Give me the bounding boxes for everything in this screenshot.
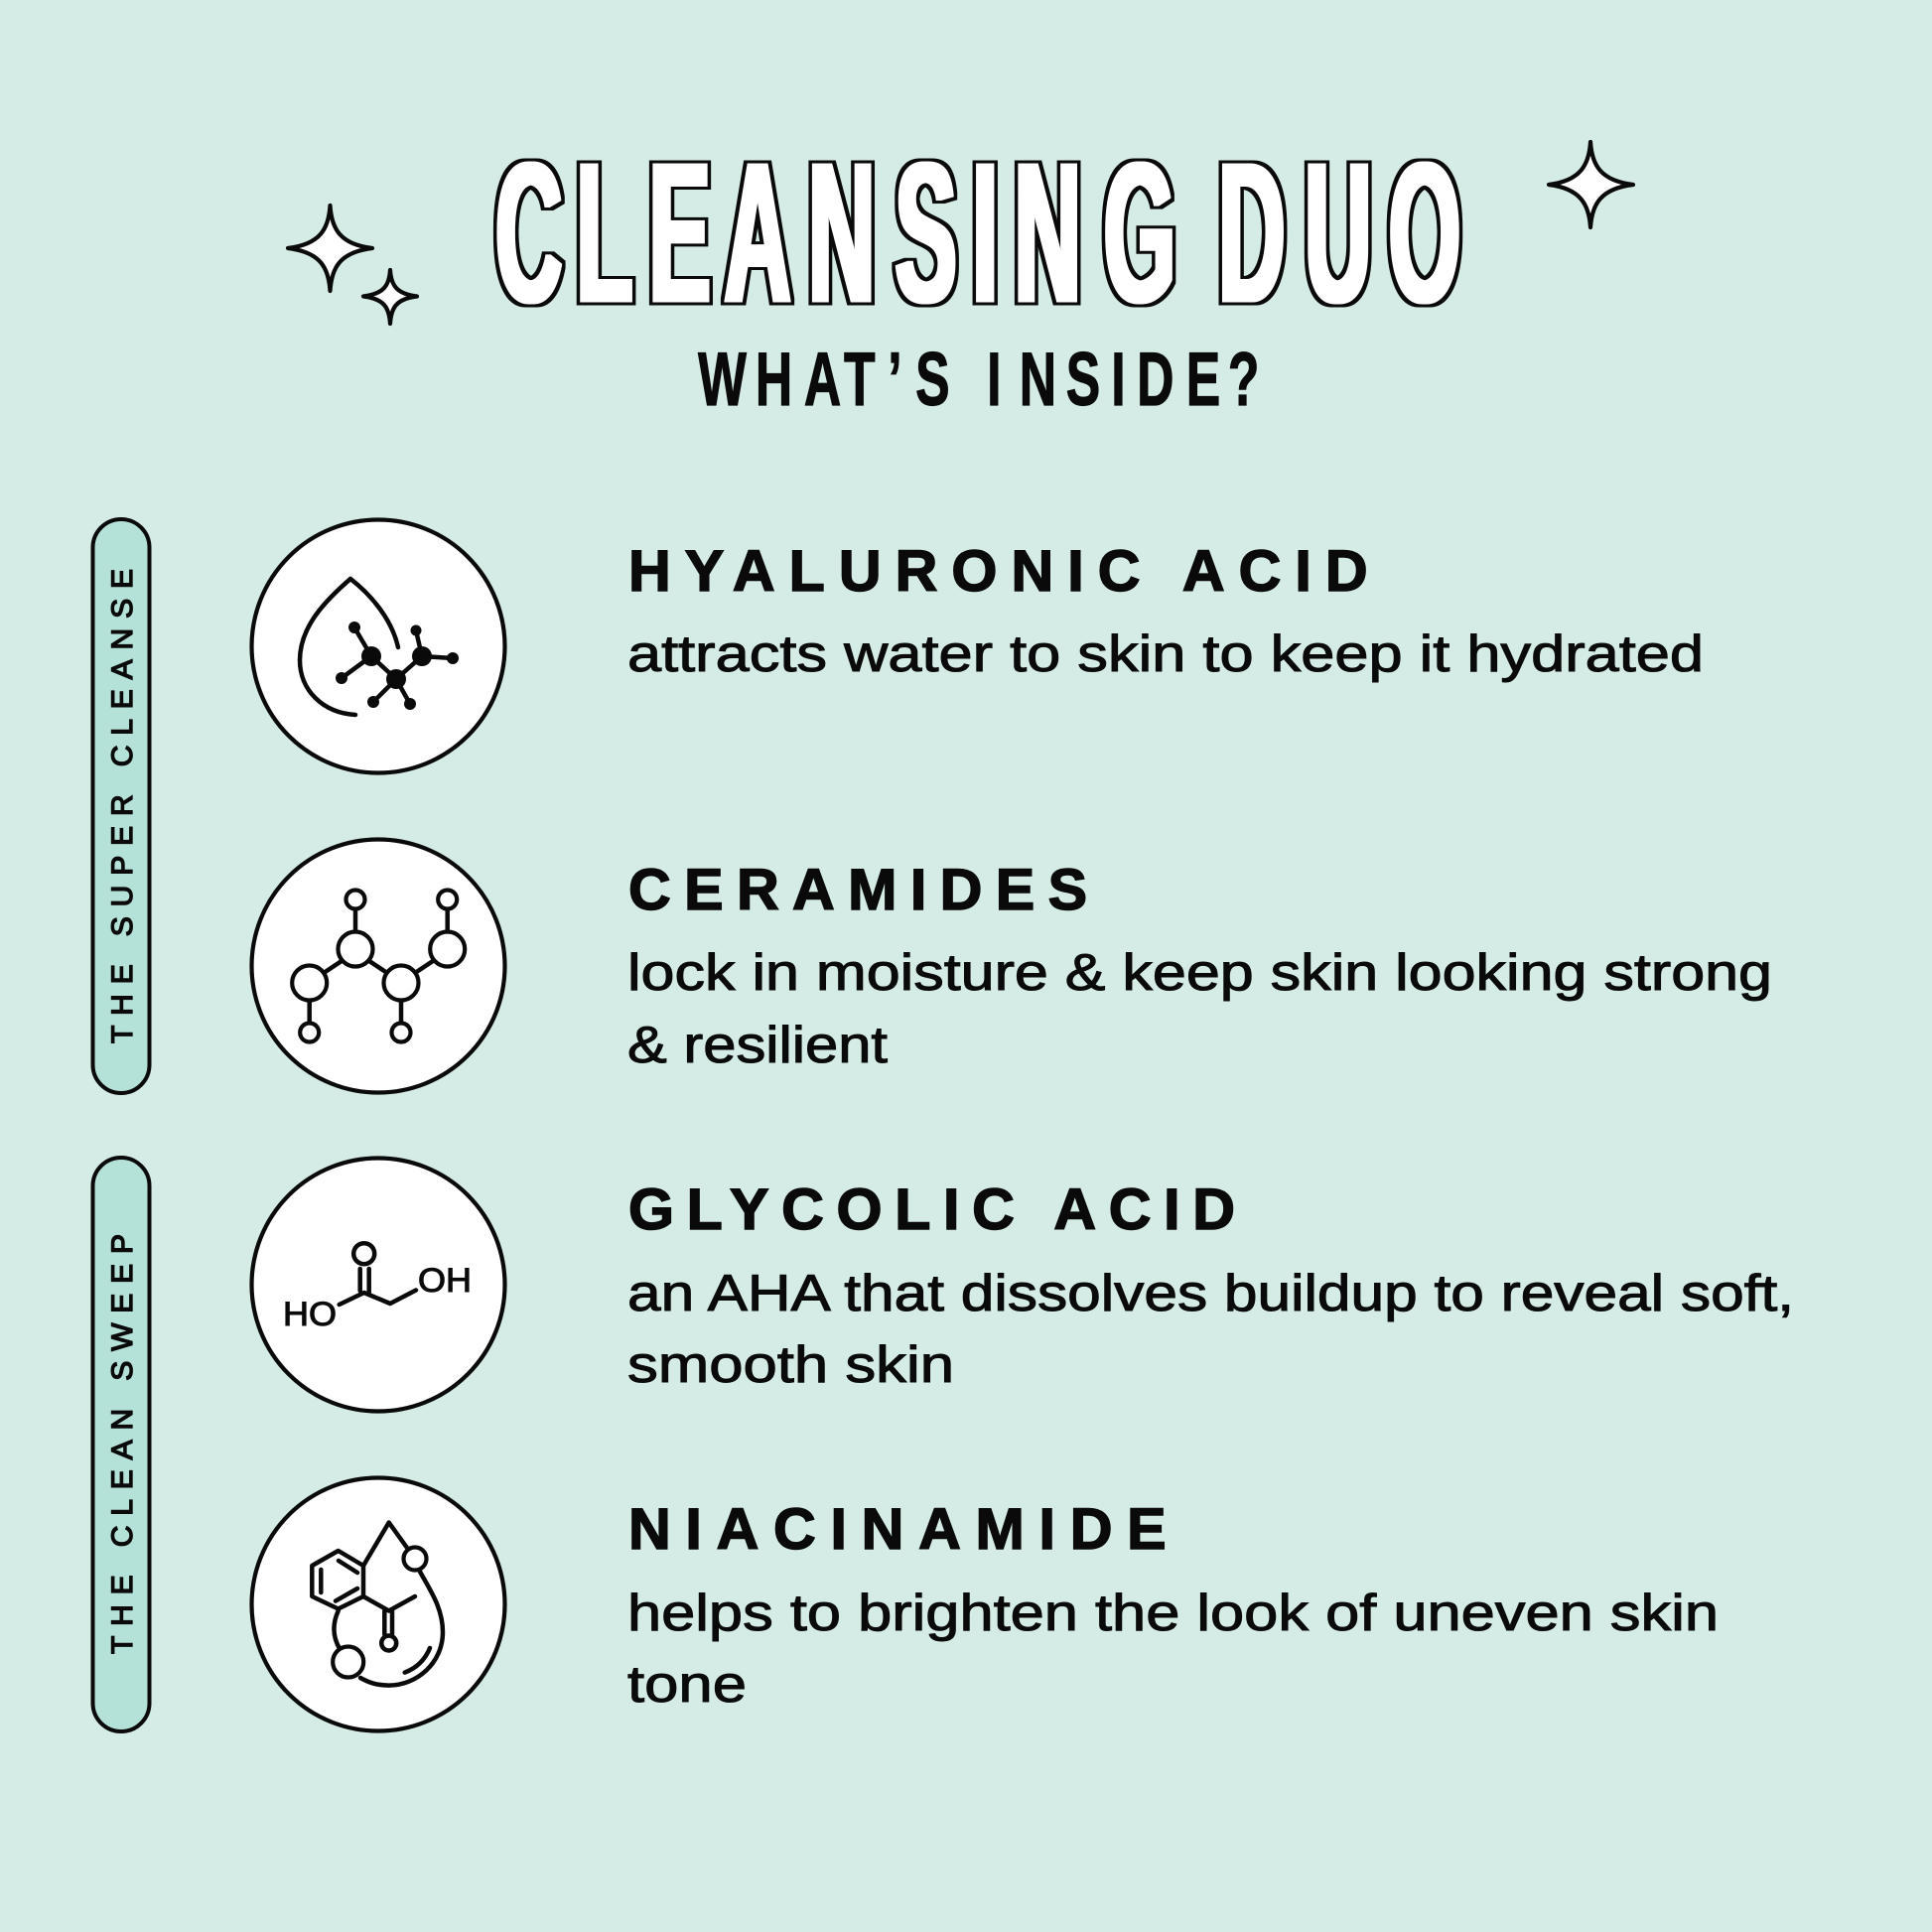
text block: ceramides bbox=[627, 859, 1772, 1074]
description: an AHA that dissolves buildup to reveal soft, bbox=[627, 1265, 1794, 1322]
heading: CERAMIDES bbox=[628, 859, 1087, 922]
description bbox=[627, 1265, 1794, 1394]
icon: ceramides bbox=[252, 840, 504, 1092]
icon: niacinamide bbox=[252, 1477, 504, 1731]
heading: NIACINAMIDE bbox=[628, 1498, 1167, 1562]
panel: the clean sweep label: THE CLEAN SWEEP bbox=[106, 1234, 139, 1654]
description: tone bbox=[627, 1656, 747, 1714]
description: helps to brighten the look of uneven skin bbox=[627, 1585, 1719, 1642]
title: CLEANSING DUO bbox=[495, 122, 1460, 345]
description: & resilient bbox=[627, 1017, 889, 1074]
icon: small sparkle left bbox=[363, 270, 417, 324]
icon: hyaluronic acid bbox=[252, 520, 504, 772]
icon: glycolic acid bbox=[252, 1158, 504, 1412]
subtitle: WHAT’S INSIDE? bbox=[698, 337, 1259, 421]
icon: sparkle right bbox=[1549, 142, 1633, 227]
description: smooth skin bbox=[627, 1336, 954, 1394]
panel: the super cleanse label bbox=[93, 519, 149, 1093]
text block: glycolic acid bbox=[627, 1178, 1794, 1394]
description: lock in moisture & keep skin looking strong bbox=[627, 944, 1772, 1002]
icon: glycolic acid: OH bbox=[418, 1262, 472, 1300]
panel: the clean sweep label bbox=[93, 1158, 149, 1731]
icon: large sparkle left bbox=[288, 206, 372, 291]
heading: HYALURONIC ACID bbox=[628, 540, 1368, 604]
heading: GLYCOLIC ACID bbox=[628, 1178, 1235, 1242]
text block: hyaluronic acid bbox=[627, 540, 1704, 683]
panel: the super cleanse label: THE SUPER CLEANSE bbox=[106, 569, 139, 1043]
description: attracts water to skin to keep it hydrated bbox=[627, 625, 1704, 683]
text block: niacinamide bbox=[627, 1498, 1719, 1714]
description bbox=[627, 1585, 1719, 1714]
icon: glycolic acid: HO bbox=[283, 1296, 337, 1333]
description bbox=[627, 944, 1772, 1074]
